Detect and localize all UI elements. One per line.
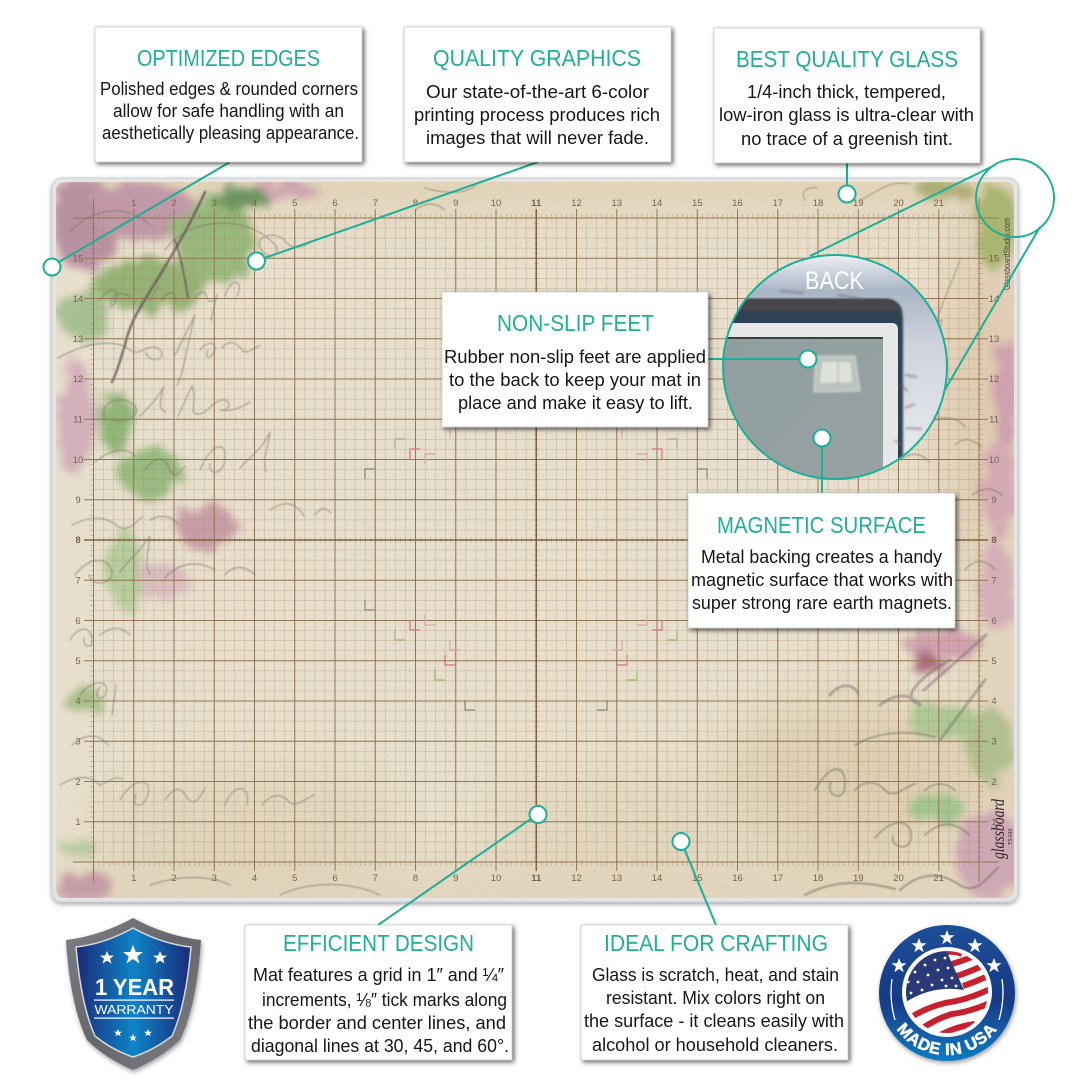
leader lines — [52, 162, 847, 925]
ruler numbers: right: 15 — [989, 254, 999, 264]
panel: ideal for crafting: resistant. Mix colors right on — [606, 988, 825, 1008]
panel: best quality glass — [714, 28, 980, 163]
ruler numbers: left: 2 — [75, 777, 81, 788]
panel: efficient design: Mat features a grid in 1″ and ¼″ — [253, 965, 505, 985]
ruler numbers: right: 12 — [989, 374, 999, 385]
ruler numbers: right: 10 — [989, 455, 999, 466]
stars — [100, 945, 167, 1041]
panel: non-slip feet: place and make it easy to lift. — [458, 393, 693, 413]
ruler numbers: left: 8 — [75, 535, 81, 546]
ruler numbers: top: 10 — [491, 198, 501, 209]
ruler numbers: bottom: 1 — [131, 873, 136, 884]
badge: made in USA seal — [877, 924, 1019, 1066]
flag canton — [906, 951, 964, 1002]
brand url: GlassboardStudio.com — [1002, 218, 1012, 290]
ruler numbers: right: 7 — [991, 576, 997, 586]
ruler numbers: bottom: 14 — [652, 873, 662, 884]
rubber foot — [814, 356, 860, 392]
ruler numbers: left — [74, 255, 83, 825]
ruler numbers: top: 18 — [813, 198, 823, 209]
ruler numbers: bottom: 2 — [171, 873, 177, 884]
ruler numbers: top: 11 — [531, 198, 542, 209]
panel: efficient design: the border and center lines, and — [248, 1013, 506, 1033]
glassboard signature: glassboard — [988, 798, 1008, 859]
ruler numbers: bottom: 10 — [491, 873, 501, 884]
ruler numbers: left: 14 — [73, 294, 83, 305]
ruler numbers: top: 17 — [772, 198, 783, 209]
panel: best quality glass: BEST QUALITY GLASS — [736, 46, 958, 72]
ruler numbers: left: 7 — [75, 576, 81, 586]
ruler numbers: right: 6 — [991, 616, 997, 627]
ruler numbers: left: 15 — [73, 254, 83, 264]
magnifier connector lines — [810, 165, 1040, 393]
panel: best quality glass: low-iron glass is ultra-clear with — [719, 105, 974, 125]
ruler numbers: bottom: 8 — [413, 873, 418, 884]
corner alignment marks — [365, 469, 707, 710]
panel: optimized edges: Polished edges & rounded corners — [100, 79, 358, 99]
ruler numbers: left: 4 — [75, 696, 81, 707]
ruler numbers: top: 1 — [131, 198, 136, 209]
ruler numbers: top: 2 — [171, 198, 177, 209]
panel: ideal for crafting: IDEAL FOR CRAFTING — [604, 930, 828, 956]
ruler numbers: right: 4 — [991, 696, 997, 707]
handwritten script background — [58, 183, 1002, 895]
ruler numbers: top: 4 — [252, 198, 257, 209]
ruler numbers: right: 8 — [991, 535, 997, 546]
ruler numbers: top: 15 — [692, 198, 703, 209]
panel: non-slip feet: Rubber non-slip feet are applied — [444, 347, 706, 367]
ruler numbers: right: 2 — [991, 777, 997, 788]
ruler numbers: right: 3 — [991, 736, 997, 748]
panel: non-slip feet: to the back to keep your mat in — [449, 370, 701, 390]
panel: non-slip feet — [442, 292, 708, 427]
ruler numbers: bottom: 18 — [813, 873, 823, 884]
ruler numbers: bottom: 20 — [893, 873, 904, 884]
ruler numbers: top: 5 — [292, 198, 297, 209]
ruler numbers: right: 11 — [989, 414, 999, 426]
ruler numbers: top: 9 — [453, 198, 458, 209]
glassboard signature — [991, 799, 1012, 859]
badge: 1 year warranty shield: 1 YEAR — [95, 974, 174, 1000]
panel: quality graphics: images that will never fade. — [426, 128, 649, 148]
ruler numbers: left: 12 — [73, 374, 83, 385]
panel: best quality glass: no trace of a greenish tint. — [741, 129, 953, 149]
ruler numbers: top: 3 — [212, 198, 217, 209]
ruler numbers: top: 19 — [853, 198, 864, 209]
ruler numbers: top: 20 — [893, 198, 904, 209]
ruler numbers: bottom: 13 — [611, 873, 622, 884]
panel: ideal for crafting — [581, 925, 848, 1060]
panel: quality graphics — [404, 27, 671, 162]
panel: ideal for crafting: alcohol or household cleaners. — [592, 1035, 838, 1055]
ruler numbers: left: 5 — [75, 656, 81, 667]
badge: 1 year warranty shield: WARRANTY — [94, 1002, 174, 1017]
callout dots — [44, 186, 856, 850]
glassboard signature: TS-010 — [1008, 828, 1014, 845]
ruler numbers: bottom: 12 — [571, 873, 582, 884]
ruler numbers: left: 11 — [73, 414, 83, 426]
panel: magnetic surface: Metal backing creates a handy — [701, 547, 942, 567]
ruler numbers: bottom: 11 — [531, 873, 542, 884]
panel: optimized edges: OPTIMIZED EDGES — [137, 45, 320, 71]
ruler numbers: right: 5 — [991, 656, 997, 667]
flag stripes — [912, 951, 988, 1033]
ruler numbers: bottom: 3 — [212, 873, 217, 884]
panel: efficient design: increments, ⅛″ tick marks along — [262, 990, 507, 1010]
ruler numbers: top: 8 — [413, 198, 418, 209]
ruler numbers: bottom: 4 — [252, 873, 257, 884]
ruler numbers: top: 14 — [652, 198, 662, 209]
ruler numbers: bottom: 15 — [692, 873, 703, 884]
badge: made in USA seal: MADE IN USA — [896, 1022, 998, 1056]
ruler numbers: left: 3 — [75, 736, 81, 748]
ruler numbers: top: 12 — [571, 198, 582, 209]
ruler numbers: bottom: 19 — [853, 873, 864, 884]
panel: ideal for crafting: Glass is scratch, heat, and stain — [592, 965, 839, 985]
ruler numbers: top: 13 — [611, 198, 622, 209]
panel: magnetic surface: magnetic surface that works with — [691, 570, 953, 590]
ruler numbers: left: 9 — [75, 495, 81, 506]
ruler numbers: top: 16 — [732, 198, 743, 209]
ruler numbers: right: 14 — [989, 294, 999, 305]
ruler numbers: right: 1 — [991, 817, 997, 828]
panel: magnetic surface: MAGNETIC SURFACE — [717, 512, 926, 538]
ruler numbers: bottom: 5 — [292, 873, 297, 884]
panel: efficient design: EFFICIENT DESIGN — [283, 930, 474, 956]
panel: magnetic surface: super strong rare earth magnets. — [692, 593, 952, 613]
ruler numbers: right: 13 — [989, 334, 999, 345]
panel: magnetic surface — [688, 493, 955, 628]
ruler numbers: bottom — [132, 874, 944, 881]
ruler numbers: bottom: 21 — [933, 873, 944, 884]
callout: back of mat magnifier — [722, 254, 948, 480]
badge: 1 year warranty shield — [66, 918, 201, 1070]
ruler numbers: top — [132, 200, 944, 206]
panel: best quality glass: 1/4-inch thick, tempered, — [747, 82, 946, 102]
panel: non-slip feet: NON-SLIP FEET — [497, 310, 654, 336]
ruler numbers: bottom: 9 — [453, 873, 458, 884]
measurement grid — [73, 198, 999, 882]
ruler numbers: left: 13 — [73, 334, 83, 345]
ruler numbers: right — [990, 255, 999, 825]
ruler numbers: bottom: 17 — [772, 873, 783, 884]
panel: ideal for crafting: the surface - it cleans easily with — [584, 1011, 844, 1031]
ruler numbers: right: 9 — [991, 495, 997, 506]
ruler numbers: bottom: 16 — [732, 873, 743, 884]
panel: quality graphics: printing process produces rich — [414, 105, 660, 125]
panel: efficient design: diagonal lines at 30, 45, and 60°. — [251, 1036, 509, 1056]
panel: quality graphics: QUALITY GRAPHICS — [433, 45, 641, 71]
ruler numbers: left: 1 — [75, 817, 81, 828]
ruler numbers: top: 7 — [373, 198, 378, 209]
panel: glass cutting mat — [40, 160, 1040, 906]
ruler numbers: bottom: 6 — [332, 873, 338, 884]
ruler numbers: top: 6 — [332, 198, 338, 209]
panel: optimized edges: aesthetically pleasing appearance. — [102, 123, 359, 143]
ruler numbers: left: 10 — [73, 455, 83, 466]
panel: efficient design — [245, 925, 512, 1060]
ruler numbers: left: 6 — [75, 616, 81, 627]
ruler numbers: bottom: 7 — [373, 873, 378, 884]
panel: optimized edges: allow for safe handling with an — [113, 101, 344, 121]
callout: back of mat magnifier: BACK — [805, 267, 864, 295]
ruler numbers: top: 21 — [933, 198, 944, 209]
floral artwork — [51, 179, 1024, 900]
small zoom circle at mat corner — [976, 159, 1054, 237]
panel: quality graphics: Our state-of-the-art 6-color — [426, 82, 649, 102]
panel: optimized edges — [95, 27, 362, 162]
